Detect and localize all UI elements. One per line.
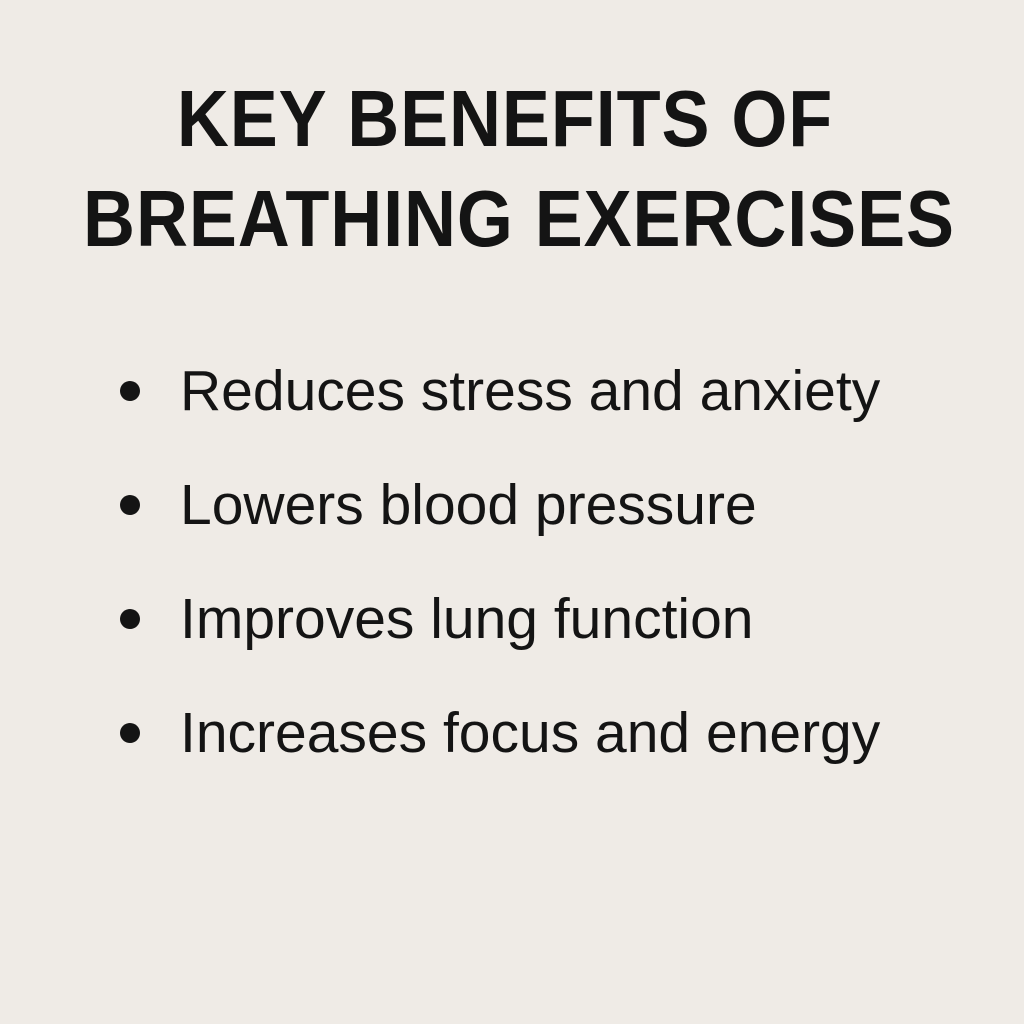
bullet item 1: Reduces stress and anxiety xyxy=(180,359,880,423)
title xyxy=(83,74,955,263)
bullet item 3: Improves lung function xyxy=(180,587,753,651)
bullet item 2: Lowers blood pressure xyxy=(180,473,757,537)
title: KEY BENEFITS OF xyxy=(177,74,833,163)
title: BREATHING EXERCISES xyxy=(83,174,955,263)
bullet item 4: Increases focus and energy xyxy=(180,701,880,765)
